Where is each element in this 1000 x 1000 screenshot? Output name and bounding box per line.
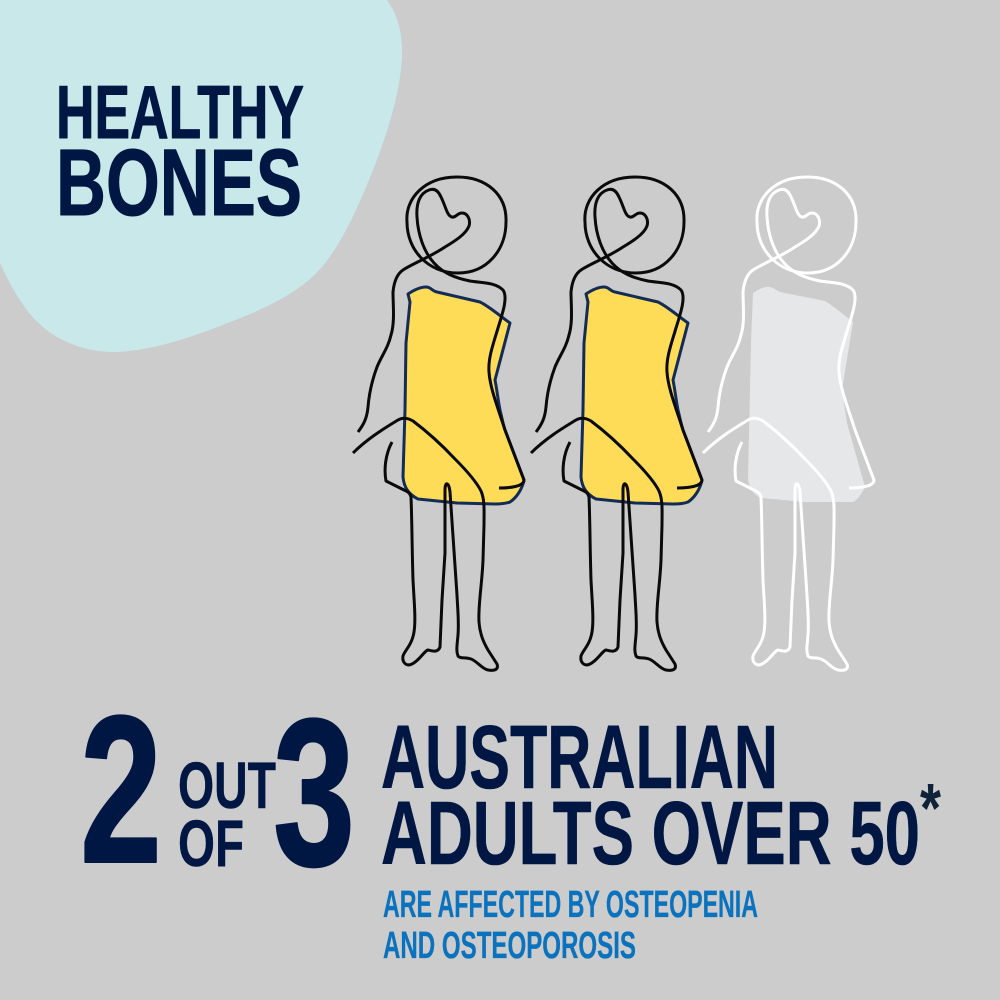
statistic: 2 out of 3: [80, 672, 355, 910]
title: [56, 70, 304, 236]
figure 3: unaffected woman in white: [703, 177, 874, 670]
subheading: [383, 884, 758, 967]
headline: Australian adults over 50: *: [920, 769, 942, 847]
torso fill: yellow: [403, 287, 524, 504]
line drawing: body: [703, 177, 874, 670]
statistic: 2 out of 3: 3: [273, 675, 355, 910]
figure 2: highlighted woman: [531, 177, 702, 670]
torso fill: pale grey: [748, 287, 865, 502]
title: HEALTHY: [56, 70, 304, 154]
line drawing: body: [531, 177, 702, 670]
line drawing: body: [353, 177, 524, 670]
subheading: AND OSTEOPOROSIS: [383, 925, 636, 967]
headline: Australian adults over 50: [381, 708, 942, 884]
statistic: 2 out of 3: OUT: [178, 748, 276, 822]
title: BONES: [56, 130, 302, 236]
headline: Australian adults over 50: AUSTRALIAN: [381, 708, 778, 808]
figure 1: highlighted woman: [353, 177, 524, 670]
subheading: ARE AFFECTED BY OSTEOPENIA: [383, 884, 758, 926]
blob: title background: [0, 0, 402, 352]
torso fill: yellow: [581, 287, 702, 504]
statistic: 2 out of 3: 2: [80, 672, 162, 907]
statistic: 2 out of 3: OF: [178, 806, 244, 880]
